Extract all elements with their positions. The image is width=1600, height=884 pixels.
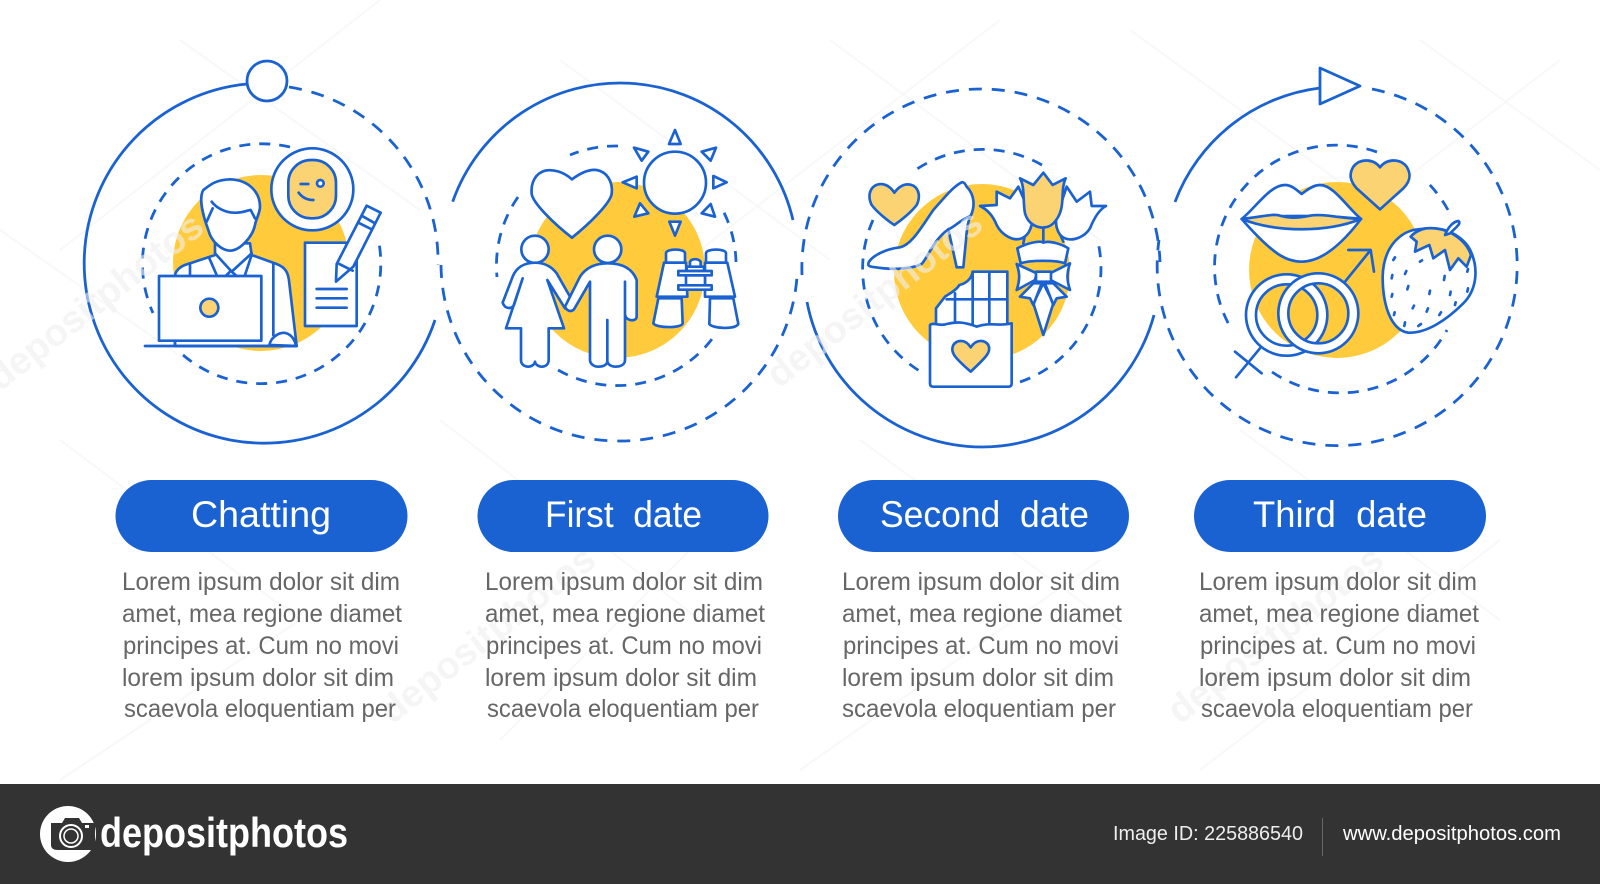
description: chatting: Lorem ipsum dolor sit dim (122, 568, 400, 596)
description: second date: lorem ipsum dolor sit dim (842, 664, 1114, 692)
description: first date: lorem ipsum dolor sit dim (485, 664, 757, 692)
label pill: third date (1194, 480, 1486, 552)
watermark text: depositphotos (759, 202, 991, 396)
icon: lips, heart, rings and strawberry (1235, 160, 1475, 377)
watermark text (0, 202, 1392, 732)
panel: chatting (116, 480, 408, 723)
start marker (247, 61, 287, 101)
description: third date: lorem ipsum dolor sit dim (1199, 664, 1471, 692)
step 2: first date ring (441, 83, 797, 441)
description: third date: amet, mea regione diamet (1199, 600, 1479, 628)
description: first date: Lorem ipsum dolor sit dim (485, 568, 763, 596)
logo wordmark: depositphotos (100, 809, 348, 856)
description: third date: principes at. Cum no movi (1200, 632, 1476, 660)
image id: Image ID: 225886540 (1113, 823, 1303, 845)
label pill: chatting (116, 480, 408, 552)
step 4: third date ring (1157, 68, 1517, 446)
description: second date (842, 568, 1122, 723)
step 3: second date ring (802, 89, 1160, 447)
label pill: first date: First date (545, 494, 702, 535)
description: first date: amet, mea regione diamet (485, 600, 765, 628)
icon: camera logo (40, 806, 96, 862)
description: chatting: principes at. Cum no movi (123, 632, 399, 660)
website url: www.depositphotos.com (1342, 823, 1561, 845)
watermark text: depositphotos (372, 538, 604, 732)
description: chatting (122, 568, 402, 723)
description: chatting: amet, mea regione diamet (122, 600, 402, 628)
description: first date (485, 568, 765, 723)
description: second date: scaevola eloquentiam per (842, 695, 1116, 723)
description: third date: Lorem ipsum dolor sit dim (1199, 568, 1477, 596)
description: chatting: scaevola eloquentiam per (124, 695, 396, 723)
description: first date: principes at. Cum no movi (486, 632, 762, 660)
footer bar (0, 784, 1600, 884)
description: second date: amet, mea regione diamet (842, 600, 1122, 628)
label pill: chatting: Chatting (191, 494, 331, 535)
icon: man at laptop with winking face and note (145, 148, 381, 346)
description: third date (1199, 568, 1479, 723)
description: second date: principes at. Cum no movi (843, 632, 1119, 660)
description: chatting: lorem ipsum dolor sit dim (122, 664, 394, 692)
panel: third date (1194, 480, 1486, 723)
panel: first date (478, 480, 768, 723)
label pill: second date (838, 480, 1129, 552)
panel: second date (838, 480, 1129, 723)
watermark text: depositphotos (1160, 538, 1392, 732)
description: second date: Lorem ipsum dolor sit dim (842, 568, 1120, 596)
icon: couple, heart, sun and binoculars (503, 130, 738, 367)
description: first date: scaevola eloquentiam per (487, 695, 759, 723)
end arrow (1320, 68, 1360, 104)
label pill: second date: Second date (880, 494, 1089, 535)
label pill: first date (478, 480, 768, 552)
step 1: chatting ring (84, 61, 438, 443)
description: third date: scaevola eloquentiam per (1201, 695, 1473, 723)
label pill: third date: Third date (1253, 494, 1427, 535)
icon: heart, high heel, chocolate and bouquet (868, 173, 1106, 387)
